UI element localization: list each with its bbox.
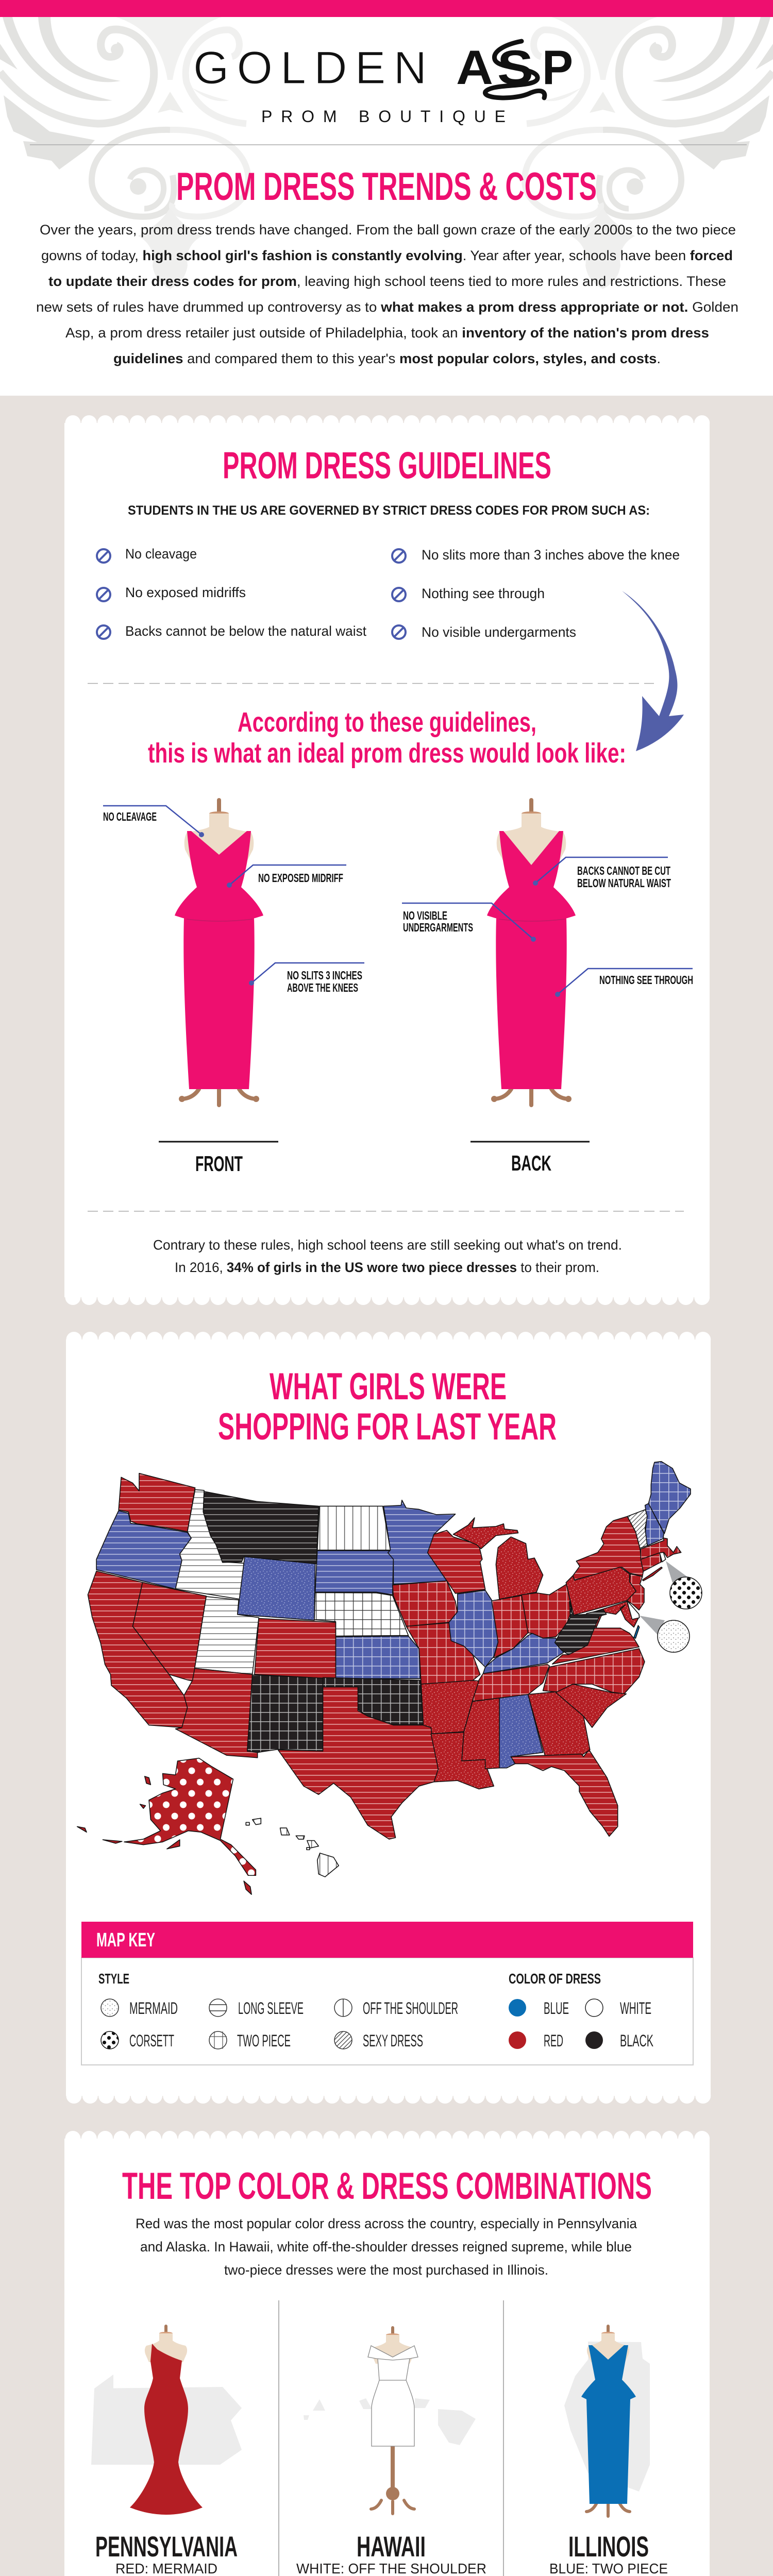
paragraph: combinations: and Alaska. In Hawaii, white off-the-shoulder dresses reigned supreme, while blue xyxy=(140,2239,632,2255)
logo: Golden Asp: GOLDEN xyxy=(193,42,427,93)
top pink bar xyxy=(0,0,773,17)
mannequin: front xyxy=(175,800,263,1105)
heading: ideal dress xyxy=(148,707,626,769)
rules list: No slits more than 3 inches above the knee xyxy=(422,547,680,563)
callout: no slits: ABOVE THE KNEES xyxy=(287,981,358,994)
callout: no visible undergarments: UNDERGARMENTS xyxy=(403,921,473,934)
key: colour: RED xyxy=(544,2031,563,2050)
card: Pennsylvania: PENNSYLVANIA xyxy=(95,2530,238,2563)
heading: map xyxy=(218,1366,557,1448)
rules list: No exposed midriffs xyxy=(125,585,246,600)
callout: nothing see through: NOTHING SEE THROUGH xyxy=(599,973,693,987)
callout: no cleavage xyxy=(103,806,204,837)
label: back: BACK xyxy=(511,1151,551,1175)
intro paragraph: Asp, a prom dress retailer just outside of Philadelphia, took an inventory of the nation's prom dress xyxy=(65,325,709,341)
callout: no slits: NO SLITS 3 INCHES xyxy=(287,969,362,982)
key: colour: BLACK xyxy=(620,2031,653,2050)
heading: ideal dress: According to these guidelines, xyxy=(238,707,536,738)
callout: no slits xyxy=(249,963,364,994)
mannequin: back xyxy=(487,800,576,1105)
closing text: Contrary to these rules, high school teens are still seeking out what's on trend. xyxy=(153,1238,622,1253)
panel: header xyxy=(0,0,773,396)
rules list: Nothing see through xyxy=(422,586,545,601)
logo: Golden Asp: S xyxy=(497,40,533,94)
card: Illinois xyxy=(549,2326,668,2576)
rules list: No visible undergarments xyxy=(422,624,576,640)
logo: Golden Asp: PROM BOUTIQUE xyxy=(261,107,506,126)
callout: no visible undergarments: NO VISIBLE xyxy=(403,909,447,922)
intro paragraph: guidelines and compared them to this year's most popular colors, styles, and costs . xyxy=(113,351,661,366)
logo: Golden Asp: P xyxy=(542,40,573,94)
key: colour xyxy=(509,1971,653,2050)
callout: no exposed midriff: NO EXPOSED MIDRIFF xyxy=(258,871,343,885)
key: style: MERMAID xyxy=(129,1999,178,2018)
card: Pennsylvania xyxy=(91,2326,242,2576)
key: style: TWO PIECE xyxy=(237,2031,291,2050)
callout: no cleavage: NO CLEAVAGE xyxy=(103,810,157,823)
map key: MAP KEY xyxy=(96,1929,155,1951)
callout: no exposed midriff xyxy=(227,865,346,888)
paragraph: combinations: Red was the most popular color dress across the country, especially in Pennsylvania xyxy=(136,2216,637,2231)
decorative flourish background xyxy=(0,17,773,289)
callout: Delaware mermaid detail xyxy=(640,1616,690,1652)
key: colour: BLUE xyxy=(544,1999,569,2018)
intro paragraph: new sets of rules have drummed up controversy as to what makes a prom dress appropriate or not. Golden xyxy=(36,299,738,315)
callout: backs xyxy=(533,857,671,890)
heading: map: WHAT GIRLS WERE xyxy=(270,1366,507,1408)
heading: ideal dress: this is what an ideal prom dress would look like: xyxy=(148,738,626,769)
logo: Golden Asp: A xyxy=(456,40,493,94)
map: north-east states xyxy=(552,1462,691,1664)
callout: Rhode Island corset detail xyxy=(666,1561,702,1609)
intro paragraph: gowns of today, high school girl's fashion is constantly evolving. Year after year, schools have been forced xyxy=(41,248,733,263)
callout: backs: BACKS CANNOT BE CUT xyxy=(577,864,670,877)
arrow xyxy=(622,591,684,751)
US map xyxy=(88,1473,645,1839)
callout: nothing see through xyxy=(555,969,693,997)
heading: guidelines: PROM DRESS GUIDELINES xyxy=(223,445,551,486)
card: Hawaii xyxy=(296,2328,486,2576)
key: colour: COLOR OF DRESS xyxy=(509,1971,601,1987)
key: style: SEXY DRESS xyxy=(363,2031,423,2050)
intro paragraph: to update their dress codes for prom , leaving high school teens tied to more rules and restrictions. These xyxy=(48,274,726,289)
map key xyxy=(81,1922,693,2065)
closing text xyxy=(153,1238,622,1275)
callout: no visible undergarments xyxy=(402,903,536,942)
paragraph: combinations: two-piece dresses were the most purchased in Illinois. xyxy=(224,2262,548,2278)
rules list xyxy=(97,546,680,640)
intro paragraph: Over the years, prom dress trends have changed. From the ball gown craze of the early 2000s to the two piece xyxy=(40,222,736,238)
key: style: STYLE xyxy=(98,1971,129,1987)
subheading: STUDENTS IN THE US ARE GOVERNED BY STRICT DRESS CODES FOR PROM SUCH AS: xyxy=(128,503,650,518)
callout: backs: BELOW NATURAL WAIST xyxy=(577,876,671,890)
heading: map: SHOPPING FOR LAST YEAR xyxy=(218,1406,557,1448)
rules list: Backs cannot be below the natural waist xyxy=(125,623,366,639)
key: style: LONG SLEEVE xyxy=(238,1999,304,2018)
paragraph: combinations xyxy=(136,2216,637,2278)
logo: Golden Asp xyxy=(193,40,573,126)
key: style: OFF THE SHOULDER xyxy=(363,1999,458,2018)
rules list: No cleavage xyxy=(125,546,197,562)
panel: prom dress guidelines xyxy=(64,423,710,1297)
panel: what girls were shopping for xyxy=(66,1340,711,2096)
card: Illinois: ILLINOIS xyxy=(568,2530,649,2563)
map: Alaska and Hawaii xyxy=(77,1758,339,1894)
panel: top colour and dress combinations xyxy=(64,2139,710,2576)
closing text: In 2016, 34% of girls in the US wore two piece dresses to their prom. xyxy=(175,1260,599,1275)
card: Hawaii: HAWAII xyxy=(357,2530,426,2563)
key: style: CORSETT xyxy=(129,2031,174,2050)
key: colour: WHITE xyxy=(620,1999,651,2018)
intro paragraph xyxy=(36,222,738,366)
key: style xyxy=(98,1971,458,2050)
label: front: FRONT xyxy=(195,1151,243,1176)
